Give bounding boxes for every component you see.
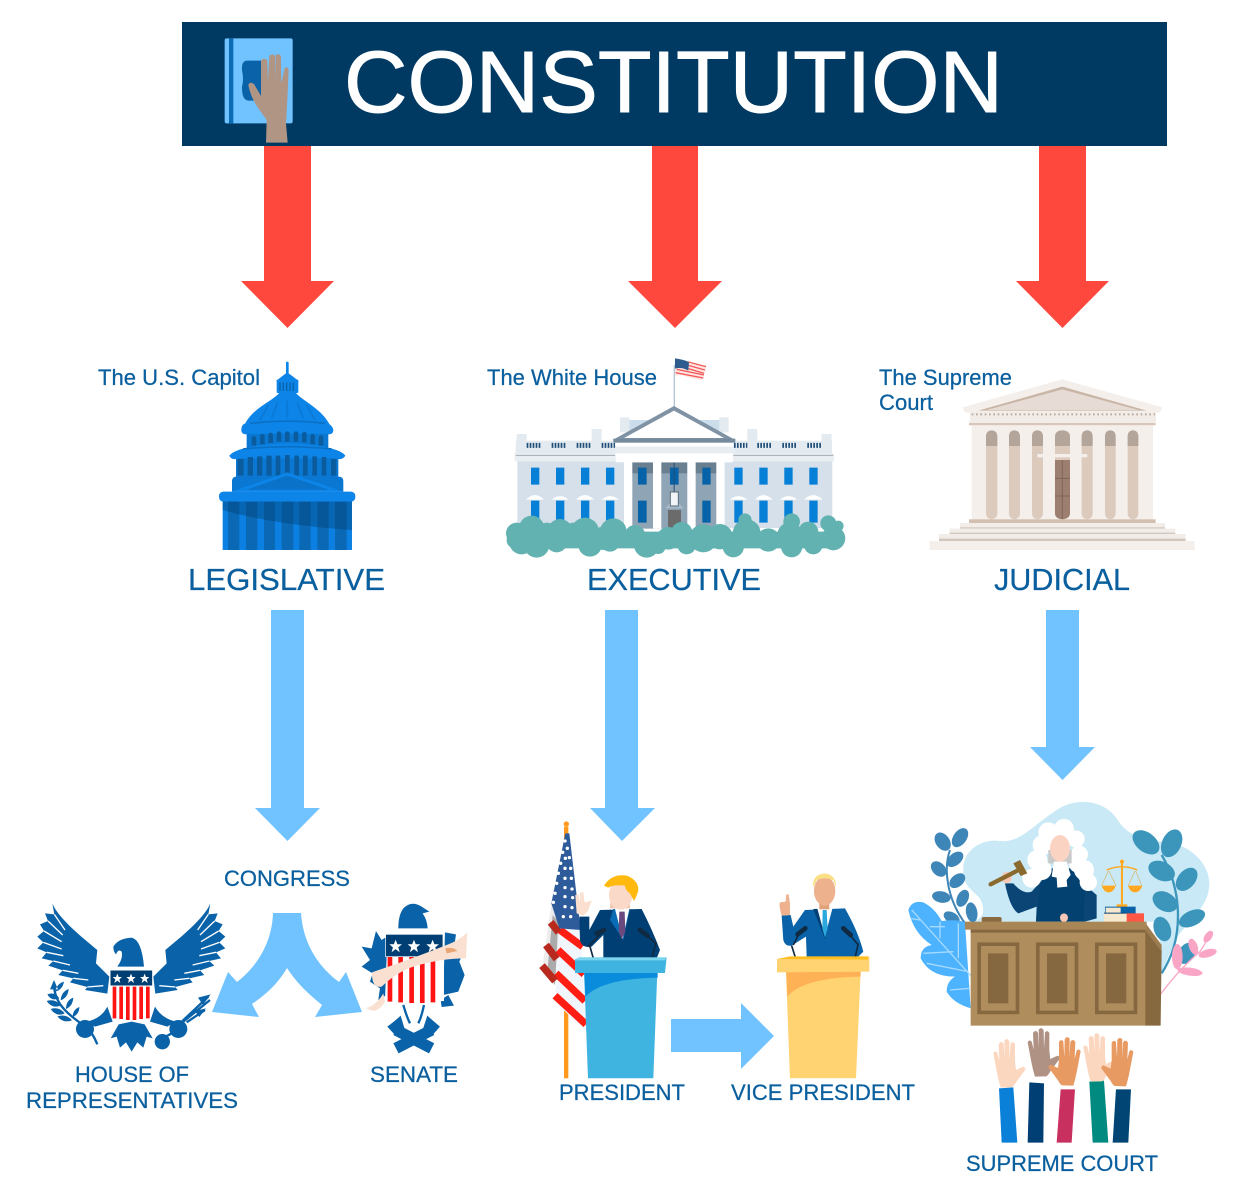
blue arrow: legislative to congress	[255, 610, 320, 841]
blue arrow: judicial to supreme court	[1030, 610, 1095, 780]
judge	[991, 819, 1097, 922]
icon: hand on book	[225, 38, 293, 143]
heading: executive: EXECUTIVE	[587, 562, 761, 597]
caption: The White House: The White House	[487, 365, 657, 390]
flag pole	[564, 821, 569, 1078]
heading: legislative: LEGISLATIVE	[188, 562, 385, 597]
heading: judicial: JUDICIAL	[994, 562, 1130, 597]
bushes	[506, 513, 845, 558]
blue arrow: executive to president	[590, 610, 655, 841]
talons and body	[87, 1007, 176, 1027]
icon: senate shield	[362, 904, 467, 1048]
vice president	[780, 873, 863, 958]
icon: judge at bench	[908, 802, 1218, 1026]
caption: The Supreme Court: Court	[879, 390, 933, 415]
tail	[111, 1022, 153, 1052]
bench	[965, 917, 1162, 1026]
head	[113, 938, 144, 967]
label: congress: CONGRESS	[224, 866, 350, 891]
label: house of representatives	[26, 1062, 238, 1113]
american flag	[542, 833, 586, 1032]
icon: president at podium with flag	[542, 821, 667, 1078]
big blue leaf	[908, 902, 972, 1008]
header banner	[182, 22, 1167, 146]
caption: The U.S. Capitol: The U.S. Capitol	[98, 365, 260, 390]
right wing	[153, 903, 225, 994]
label: house of representatives: REPRESENTATIVES	[26, 1088, 238, 1113]
foliage	[362, 931, 387, 1000]
blue arrow: president to vice president	[671, 1003, 774, 1069]
label: supreme court: SUPREME COURT	[966, 1151, 1158, 1176]
label: vice president: VICE PRESIDENT	[731, 1080, 915, 1105]
background blob	[963, 802, 1209, 975]
icon: capitol building	[219, 362, 355, 550]
icon: eagle seal	[37, 903, 225, 1052]
president	[575, 875, 660, 958]
scales of justice	[1102, 860, 1142, 907]
icon: white house	[506, 358, 845, 558]
shield	[110, 970, 153, 986]
fork arrow: congress to chambers	[212, 913, 362, 1017]
balls and branches	[76, 1020, 94, 1038]
red arrow: to judicial	[1016, 146, 1109, 328]
label: house of representatives: HOUSE OF	[75, 1062, 189, 1087]
label: senate: SENATE	[370, 1062, 458, 1087]
shield	[385, 957, 444, 1003]
icon: supreme court building	[930, 379, 1195, 550]
right branch	[1128, 825, 1208, 973]
caption: The Supreme Court: The Supreme	[879, 365, 1012, 390]
pink sprig	[1160, 929, 1218, 995]
blue podium	[575, 957, 667, 1078]
red arrow: to legislative	[241, 146, 334, 328]
title: CONSTITUTION	[344, 34, 1003, 131]
crossed axes	[396, 1030, 432, 1048]
label: president: PRESIDENT	[559, 1080, 685, 1105]
left wing	[37, 903, 109, 994]
yellow podium	[777, 956, 869, 1078]
helmet	[398, 904, 429, 928]
icon: raised hands	[993, 1028, 1133, 1143]
ribbon	[372, 932, 467, 987]
left branch	[928, 825, 979, 927]
icon: vice president at podium	[777, 873, 869, 1078]
caption: The Supreme Court	[879, 365, 1012, 415]
books	[1104, 907, 1144, 922]
red arrow: to executive	[628, 146, 722, 328]
